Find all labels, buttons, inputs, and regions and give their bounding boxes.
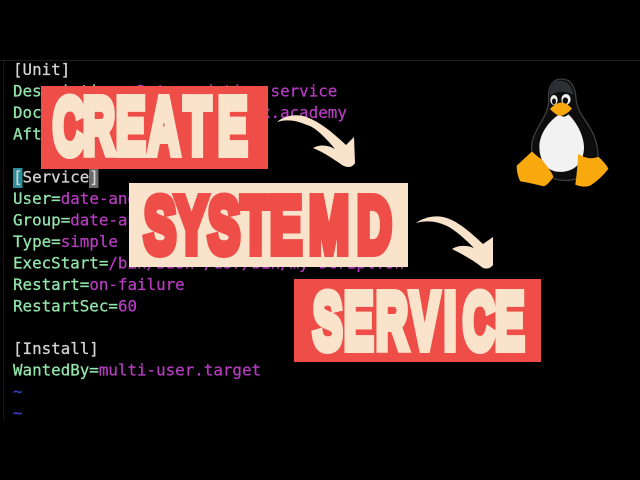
penguin head highlight xyxy=(550,81,573,97)
text block: Service section: [Service] xyxy=(13,168,99,186)
text block: Unit section: [Unit] xyxy=(13,60,70,79)
text block: Install section xyxy=(13,339,261,422)
penguin eyes xyxy=(550,94,571,105)
penguin right foot xyxy=(576,155,608,186)
text block: Install section: ~ xyxy=(13,404,23,422)
text block: Service section: Restart=on-failure xyxy=(13,275,185,294)
text block: Install section: ~ xyxy=(13,382,23,401)
text block: Service section: RestartSec=60 xyxy=(13,296,137,316)
text block: Unit section: Description= Date-and-time service xyxy=(13,82,337,100)
text block: Unit section: After=network.target xyxy=(13,124,204,144)
icon: Linux Tux penguin xyxy=(517,79,608,186)
text block: Service section: Group=date-and-time xyxy=(13,210,194,230)
heading: CREATE: CREATE xyxy=(53,82,247,171)
text block: Service section: ExecStart=/bin/bash /usr/bin/my-script.sh xyxy=(13,254,404,272)
penguin belly xyxy=(539,114,584,172)
text block: Install section: [Install] xyxy=(13,339,99,358)
text block: Service section: User=date-and-time xyxy=(13,189,185,208)
text block: Unit section: Documentation=https://linux.academy xyxy=(13,103,347,122)
arrow: CREATE to SYSTEMD xyxy=(277,115,355,167)
heading: SERVICE: SERVICE xyxy=(313,277,524,366)
arrow: SYSTEMD to SERVICE xyxy=(416,216,493,269)
text block: Install section: WantedBy=multi-user.target xyxy=(13,360,261,380)
penguin body xyxy=(532,79,598,180)
text block: Unit section xyxy=(13,60,347,144)
text block: Service section: Type=simple xyxy=(13,232,118,251)
penguin left foot xyxy=(517,152,553,186)
text block: Service section xyxy=(13,168,404,316)
penguin beak xyxy=(550,102,572,116)
panel: terminal config file xyxy=(13,60,404,422)
heading: SYSTEMD: SYSTEMD xyxy=(144,180,392,269)
